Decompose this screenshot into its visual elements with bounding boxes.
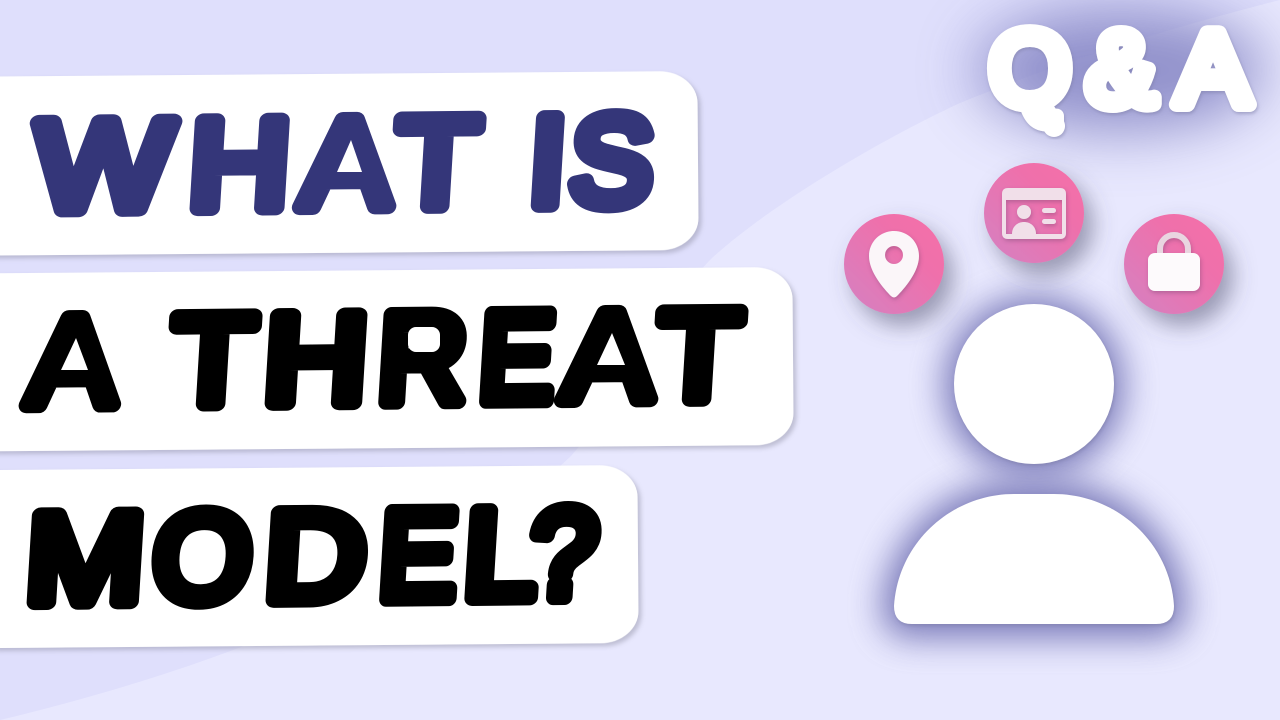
heading: what is: W xyxy=(31,95,176,237)
heading: a threat: R xyxy=(374,287,471,429)
person head xyxy=(954,304,1114,464)
icon: person xyxy=(882,296,1186,638)
heading: model: D xyxy=(261,486,370,628)
heading: what is: H xyxy=(185,94,294,236)
heading: a threat: E xyxy=(475,287,559,428)
badge: Q&A: & xyxy=(1086,12,1156,128)
panel: a threat xyxy=(0,267,794,452)
heading: what is: T xyxy=(392,92,483,233)
icon: padlock xyxy=(1124,214,1224,314)
heading: a threat: H xyxy=(260,288,372,430)
person body xyxy=(894,494,1174,624)
badge: Q&A: A xyxy=(1176,10,1249,127)
heading: what is: S xyxy=(566,91,657,232)
heading: a threat: A xyxy=(560,286,658,427)
heading: model: O xyxy=(149,486,256,628)
heading: model: ? xyxy=(526,484,601,625)
badge: Q&A xyxy=(975,8,1265,132)
heading: what is: I xyxy=(525,92,570,232)
heading: what is: A xyxy=(298,93,396,234)
icon: location pin xyxy=(844,214,944,314)
icon: id card xyxy=(984,163,1084,263)
badge: Q&A: Q xyxy=(990,12,1070,128)
heading: model xyxy=(22,482,601,630)
heading: model: L xyxy=(460,484,541,626)
heading: model: E xyxy=(375,484,461,626)
heading: model: M xyxy=(22,488,148,630)
panel: model xyxy=(0,465,639,648)
panel: what is xyxy=(0,71,699,256)
heading: a threat: T xyxy=(168,289,259,431)
heading: a threat xyxy=(25,284,745,433)
heading: a threat: A xyxy=(25,291,121,433)
heading: a threat: T xyxy=(654,285,745,426)
heading: what is xyxy=(31,90,657,237)
